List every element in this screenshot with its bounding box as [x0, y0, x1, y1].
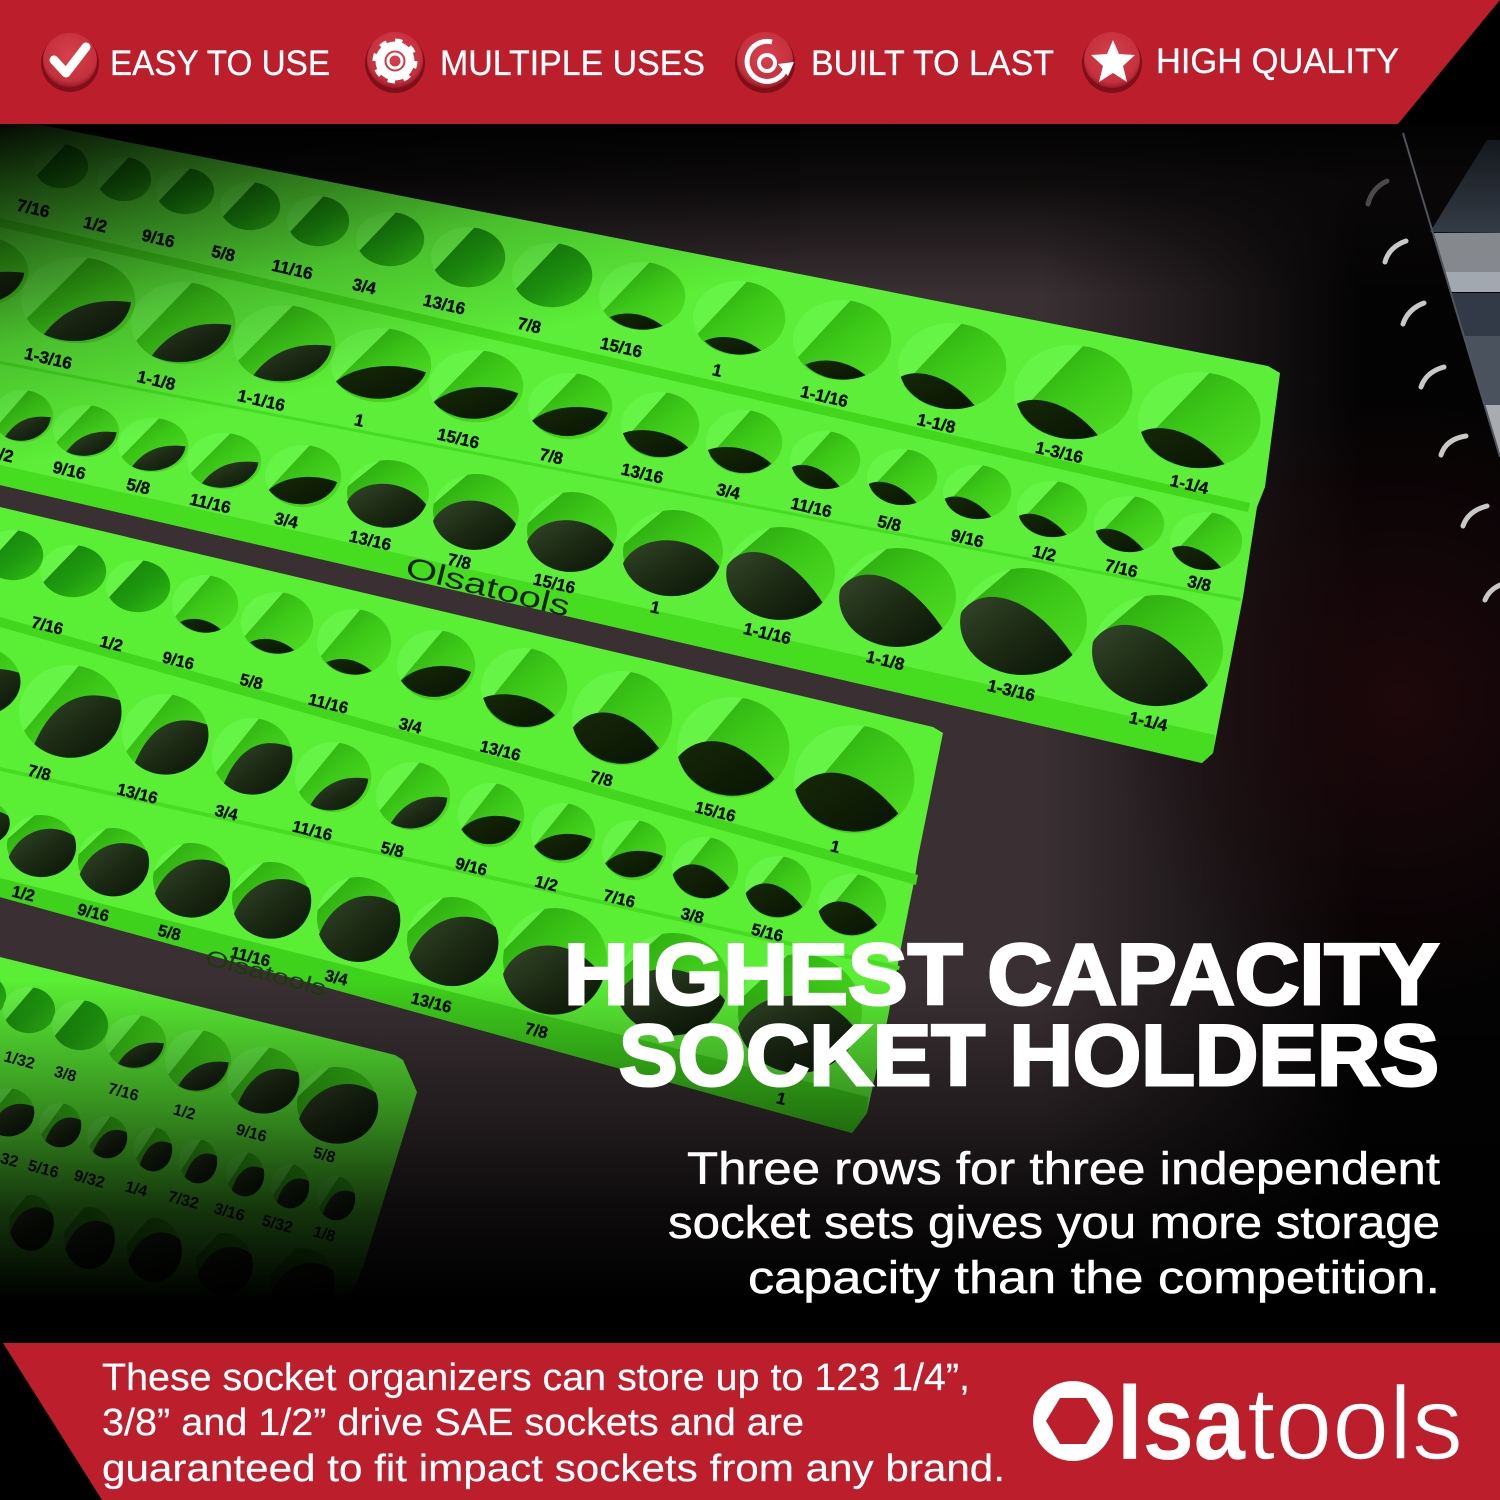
description text: guaranteed to fit impact sockets from any brand. [102, 1448, 1005, 1490]
tray 1: three-row socket holder [0, 117, 1280, 763]
tray 1 size labels: 13/16 [619, 460, 665, 488]
tray 3: fractional socket holder fading into shadow [0, 957, 417, 1320]
tray 3 size labels: 5/8 [311, 1145, 337, 1167]
tray 2 size labels: 11/16 [228, 944, 272, 971]
icon: check mark [41, 33, 99, 92]
tray 2 size labels: 1/2 [533, 873, 560, 896]
tray 1 front edge and row grooves [0, 218, 1250, 763]
tray 1 size labels: 7/16 [1103, 556, 1139, 582]
tray 1 size labels: 1-1/16 [236, 386, 287, 415]
feature: multiple uses: MULTIPLE USES [440, 44, 705, 83]
tray 1 size labels: 11/16 [789, 494, 834, 522]
headline: SOCKET HOLDERS [619, 1008, 1439, 1104]
tray 2 size labels: 5/8 [379, 839, 406, 862]
body copy: capacity than the competition. [748, 1252, 1440, 1303]
tray 1 size labels: 11/16 [188, 490, 233, 518]
Olsatools logo [1033, 1366, 1463, 1482]
tray 1 size labels: 5/8 [125, 475, 152, 499]
tray 2 size labels: 3/4 [397, 715, 424, 738]
tray 1 brand mark: Olsatools [402, 552, 573, 623]
tray 1 size labels: 3/4 [273, 509, 300, 533]
tray 1 size labels: 7/8 [538, 445, 565, 469]
tray 1 size labels: 9/16 [51, 458, 87, 484]
bottom banner [3, 1343, 1500, 1500]
tray 1 size labels: 1/2 [1031, 542, 1058, 566]
tray 2 holes [0, 530, 914, 1073]
tray 3 size labels: 7/32 [166, 1188, 201, 1213]
tray 1 size labels: 1-1/8 [135, 367, 177, 394]
feature: easy to use: EASY TO USE [110, 44, 330, 83]
tray 3 body [0, 957, 417, 1320]
tray 1 size labels: 3/4 [715, 480, 742, 504]
tray 2 size labels: 1 [829, 837, 842, 857]
Olsatools logo: tools [1247, 1366, 1463, 1482]
Olsatools logo: O [1038, 1374, 1108, 1476]
tray 1 size labels: 11/16 [270, 256, 315, 284]
tray 2 size labels: 1/2 [10, 883, 37, 906]
tray 2 size labels: 13/16 [478, 737, 522, 765]
tray 2 size labels: 13/16 [115, 780, 159, 808]
headline [564, 927, 1439, 1104]
tray 2 size labels: 9/16 [75, 901, 111, 926]
icon: cycle gear [735, 32, 795, 93]
tray 3 size labels: 1/4 [123, 1179, 149, 1201]
drawer side rail with grey steel panels [1403, 133, 1500, 457]
tray 1 size labels: 3/8 [1186, 572, 1213, 596]
tray 1 size labels: 7/16 [15, 196, 51, 222]
tray 2 size labels: 11/16 [306, 691, 350, 718]
tray 2 size labels: 5/8 [156, 922, 183, 945]
tray 1 size labels: 1 [352, 410, 366, 431]
tray 1 size labels: 5/8 [210, 242, 237, 266]
tray 1 size labels: 1-1/16 [799, 382, 850, 411]
tray 3 holes [0, 974, 378, 1314]
tray 1 size labels: 5/8 [876, 512, 903, 536]
tray 2 size labels: 13/16 [409, 989, 453, 1017]
feature: built to last: BUILT TO LAST [811, 44, 1054, 83]
tray 2 size labels: 3/4 [213, 802, 240, 825]
tray 1 size labels: 15/16 [435, 425, 481, 453]
Olsatools logo: lsa [1117, 1366, 1246, 1482]
tray 1 size labels: 1-1/4 [1127, 708, 1170, 735]
drawer clips [1368, 181, 1500, 600]
tray 1 size labels: 1-1/4 [1168, 471, 1211, 498]
banner background [3, 1343, 1500, 1500]
icon: gear [365, 32, 425, 93]
tray 1 size labels: 1-3/16 [1034, 438, 1085, 467]
tray 1 size labels [0, 196, 1213, 735]
tray 1 size labels: 15/16 [531, 570, 577, 598]
tray 1 size labels: 13/16 [421, 291, 467, 319]
headline: HIGHEST CAPACITY [564, 927, 1439, 1023]
tray 1 body [0, 117, 1280, 763]
tray 2: three-row socket holder [0, 507, 943, 1133]
tray 2 size labels: 3/8 [679, 905, 706, 928]
tray 2 size labels: 9/16 [453, 855, 489, 880]
tray 1 size labels: 13/16 [347, 527, 393, 555]
tray 1 size labels: 9/16 [140, 226, 176, 252]
tray 2 size labels: 1/2 [98, 633, 125, 656]
tray 2 size labels: 11/16 [290, 818, 334, 845]
description text: 3/8” and 1/2” drive SAE sockets and are [102, 1402, 804, 1444]
top banner [0, 0, 1500, 124]
tray 2 body [0, 507, 943, 1133]
tray 3 size labels: 9/32 [72, 1167, 107, 1192]
tray 3 size labels: 5/32 [260, 1212, 295, 1237]
tray 1 size labels: 1-1/8 [864, 647, 906, 674]
tray 2 size labels: 7/8 [523, 1020, 550, 1043]
tray 3 size labels [0, 1048, 337, 1246]
description text: These socket organizers can store up to 123 1/4”, [102, 1357, 970, 1399]
tray 2 size labels: 5/8 [238, 671, 265, 694]
body copy: socket sets gives you more storage [668, 1197, 1440, 1248]
tray 1 size labels: 1-1/16 [742, 619, 793, 648]
tray 2 brand mark: Olsatools [203, 945, 329, 1001]
tray 2 size labels: 7/8 [588, 768, 615, 791]
tray 2 size labels: 7/16 [29, 614, 65, 639]
tray 1 size labels: 7/8 [516, 314, 543, 338]
tray 2 front edge and row grooves [0, 617, 918, 1133]
tray 1 size labels: 1 [648, 597, 662, 618]
tray 1 size labels: 1-3/16 [986, 676, 1037, 705]
tray 1 size labels: 1 [710, 360, 724, 381]
tray 2 size labels [10, 614, 842, 1109]
tray 3 size labels: 3/16 [212, 1200, 247, 1225]
tray 3 size labels: 5/16 [26, 1157, 61, 1182]
tray 1 size labels: 9/16 [949, 526, 985, 552]
tray 2 size labels: 1 [775, 1089, 788, 1109]
tray 2 size labels: 3/4 [323, 967, 350, 990]
tray 2 size labels: 9/16 [160, 649, 196, 674]
banner background [0, 0, 1500, 124]
tray 2 size labels: 7/16 [601, 887, 637, 912]
tray 3 size labels: 1/2 [171, 1102, 197, 1124]
body copy: Three rows for three independent [687, 1143, 1441, 1194]
tray 2 size labels: 15/16 [693, 798, 737, 826]
tray 3 size labels: 7/16 [106, 1080, 141, 1105]
tray 3 size labels: 9/16 [234, 1121, 269, 1146]
tray 3 size labels: 1/32 [2, 1048, 37, 1073]
tray 1 size labels: 1-1/8 [915, 410, 957, 437]
tray 2 size labels: 5/16 [749, 921, 785, 946]
tray 2 size labels: 7/8 [26, 762, 53, 785]
description text [102, 1357, 1005, 1490]
icon: star [1082, 32, 1142, 93]
feature: high quality: HIGH QUALITY [1156, 42, 1399, 81]
tray 1 size labels: 1-3/16 [23, 344, 74, 373]
tray 1 holes [0, 144, 1260, 706]
tray 1 size labels: 7/8 [446, 550, 473, 574]
tray 1 size labels: 15/16 [598, 334, 644, 362]
body copy [668, 1143, 1441, 1303]
tray 1 size labels: 1/2 [82, 213, 109, 237]
tray 3 size labels: 1/8 [311, 1224, 337, 1246]
tray 3 size labels: 3/8 [52, 1064, 78, 1086]
tray 1 size labels: 3/4 [351, 275, 378, 299]
